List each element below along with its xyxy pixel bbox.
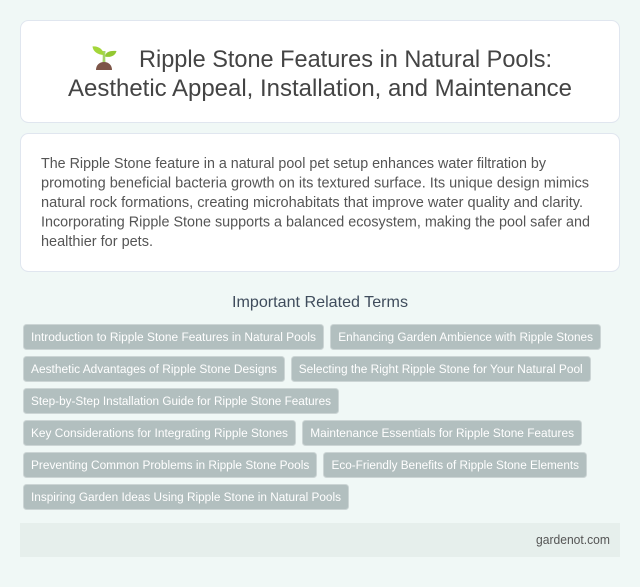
tag — [24, 356, 284, 382]
panel: description — [20, 134, 620, 272]
tag — [24, 484, 348, 510]
panel: header — [20, 20, 620, 122]
tag: Inspiring Garden Ideas Using Ripple Stone in Natural Pools — [31, 490, 341, 504]
footer — [20, 523, 620, 557]
tag: Preventing Common Problems in Ripple Stone Pools — [31, 458, 309, 472]
text block: description: promoting beneficial bacteria growth on its textured surface. Its unique design mimics — [41, 176, 589, 192]
tag — [330, 324, 600, 350]
tag: Maintenance Essentials for Ripple Stone Features — [310, 426, 574, 440]
tag — [24, 420, 296, 446]
title: Aesthetic Appeal, Installation, and Maintenance — [68, 75, 572, 102]
tag: Eco-Friendly Benefits of Ripple Stone Elements — [332, 458, 579, 472]
heading: related terms: Important Related Terms — [232, 294, 408, 311]
tag — [24, 388, 338, 414]
tag — [24, 324, 324, 350]
title — [68, 46, 572, 102]
tag: Key Considerations for Integrating Ripple Stones — [31, 426, 288, 440]
text block: description: natural rock formations, creating microhabitats that improve water quality and clarity. — [41, 195, 583, 211]
panel: related terms tags — [24, 324, 600, 510]
tag — [292, 356, 590, 382]
title: Ripple Stone Features in Natural Pools: — [139, 46, 552, 73]
tag: Enhancing Garden Ambience with Ripple Stones — [338, 330, 593, 344]
footer: gardenot.com — [536, 533, 610, 547]
text block: description: Incorporating Ripple Stone supports a balanced ecosystem, making the pool safer and — [41, 214, 590, 230]
icon: seedling — [92, 46, 116, 70]
tag: Step-by-Step Installation Guide for Ripple Stone Features — [31, 394, 331, 408]
text block: description — [41, 156, 590, 250]
tag — [324, 452, 586, 478]
tag: Aesthetic Advantages of Ripple Stone Designs — [31, 362, 277, 376]
tag: Selecting the Right Ripple Stone for Your Natural Pool — [299, 362, 583, 376]
text block: description: healthier for pets. — [41, 234, 153, 250]
text block: description: The Ripple Stone feature in a natural pool pet setup enhances water filtration by — [41, 156, 547, 172]
tag — [302, 420, 582, 446]
tag: Introduction to Ripple Stone Features in Natural Pools — [31, 330, 316, 344]
tag — [24, 452, 316, 478]
